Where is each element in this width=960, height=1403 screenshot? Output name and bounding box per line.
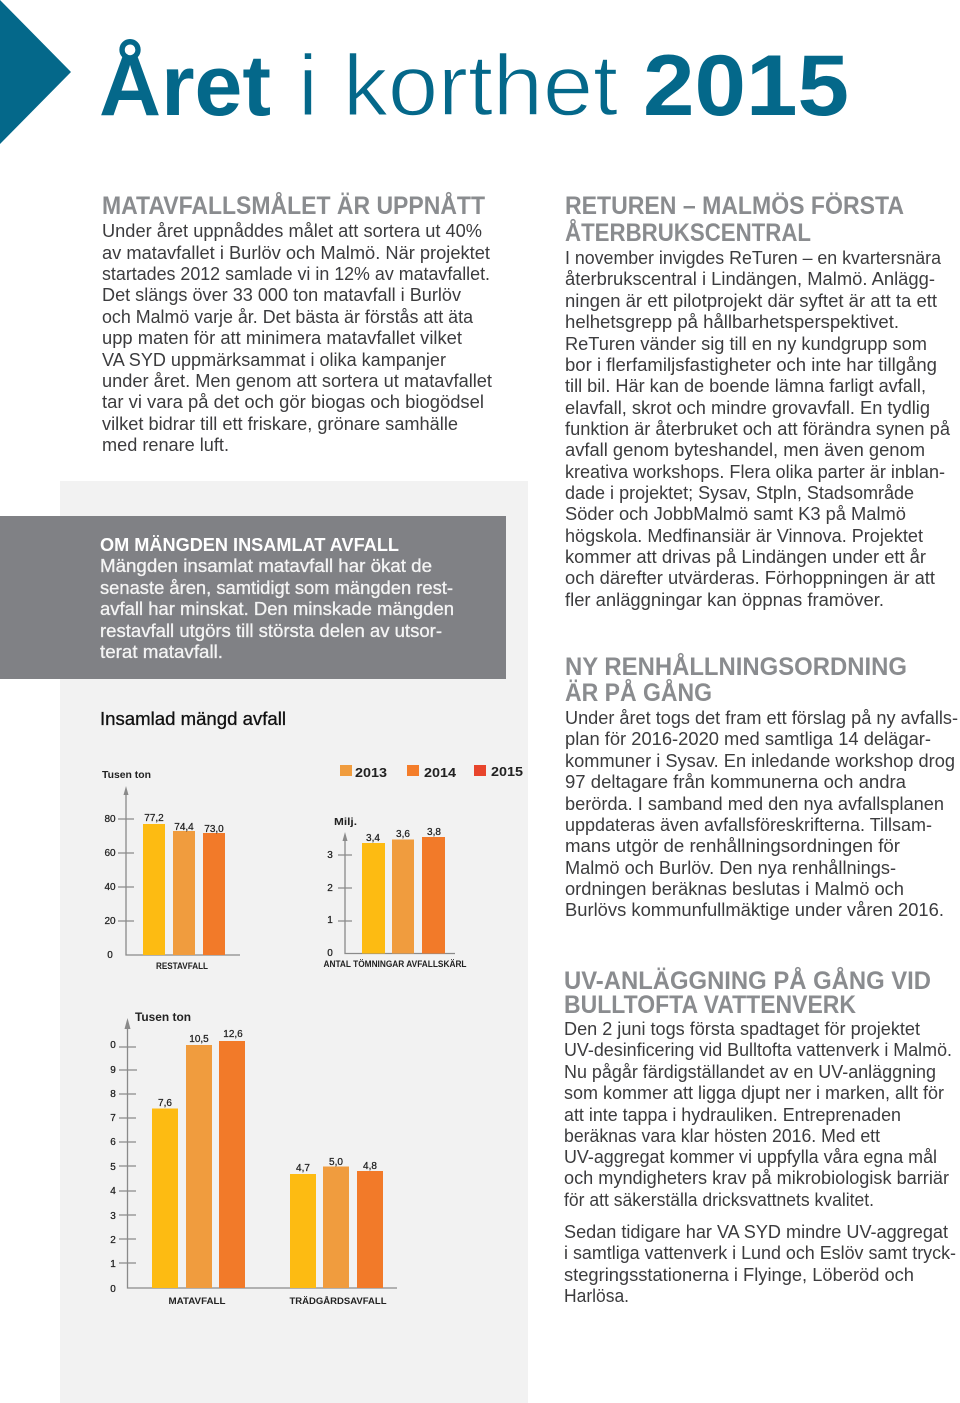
chart: matavfall och trädgårdsavfall: 3 <box>110 1211 116 1222</box>
chart: matavfall och trädgårdsavfall: 4,7 <box>296 1163 310 1174</box>
text block: uv-anläggning: Nu pågår färdigställandet av en UV-anläggning <box>564 1062 936 1082</box>
chart: restavfall <box>102 769 240 971</box>
text block: matavfallsmålet: tar vi vara på det och gör biogas och biogödsel <box>102 392 484 412</box>
text block: uv-anläggning: UV-aggregat kommer vi uppfylla våra egna mål <box>564 1147 937 1167</box>
heading: ny renhållningsordning: ÄR PÅ GÅNG <box>565 678 712 707</box>
chart: antal tömningar avfallskärl: 3 <box>327 850 333 861</box>
text block: matavfallsmålet: av matavfallet i Burlöv och Malmö. När projektet <box>102 243 490 263</box>
text block: sedan tidigare: i samtliga vattenverk i Lund och Eslöv samt tryck- <box>564 1243 956 1263</box>
chart: matavfall och trädgårdsavfall: 0 <box>110 1284 116 1295</box>
chart: restavfall: Tusen ton <box>102 769 151 781</box>
panel: om mängden insamlat avfall: terat matavfall. <box>100 642 223 662</box>
text block: returen: ReTuren vänder sig till en ny kundgrupp som <box>565 334 927 354</box>
chart: matavfall och trädgårdsavfall: 2 <box>110 1235 116 1246</box>
chart: antal tömningar avfallskärl: 2 <box>327 883 333 894</box>
title <box>99 38 849 134</box>
chart: antal tömningar avfallskärl <box>324 816 467 969</box>
text block: matavfallsmålet: upp maten för att minimera matavfallet vilket <box>102 328 462 348</box>
text block: matavfallsmålet: och Malmö varje år. Det bästa är förstås att äta <box>102 307 474 327</box>
chart: antal tömningar avfallskärl: 1 <box>327 915 333 926</box>
chart: matavfall och trädgårdsavfall <box>110 1010 397 1306</box>
text block: matavfallsmålet: under året. Men genom att sortera ut matavfallet <box>102 371 492 391</box>
text block: returen: högskola. Medfinansiär är Vinnova. Projektet <box>565 526 923 546</box>
text block: matavfallsmålet: VA SYD uppmärksammat i olika kampanjer <box>102 350 446 370</box>
chart: matavfall och trädgårdsavfall: 1 <box>110 1259 116 1270</box>
chart: restavfall: 60 <box>104 848 116 859</box>
text block: ny renhållningsordning: ordningen beräknas beslutas i Malmö och <box>565 879 904 899</box>
heading: ny renhållningsordning: NY RENHÅLLNINGSORDNING <box>565 652 907 681</box>
text block: uv-anläggning: beräknas vara klar hösten 2016. Med ett <box>564 1126 880 1146</box>
legend: 2015 <box>491 764 523 779</box>
text block: matavfallsmålet: med renare luft. <box>102 435 229 455</box>
text block: returen: kreativa workshops. Flera olika parter är inblan- <box>565 462 945 482</box>
text block: uv-anläggning: att inte tappa i hydrauliken. Entreprenaden <box>564 1105 901 1125</box>
chart: antal tömningar avfallskärl: 0 <box>327 948 333 959</box>
text block: sedan tidigare: Sedan tidigare har VA SYD mindre UV-aggregat <box>564 1222 948 1242</box>
panel: grey chart background <box>60 481 528 1403</box>
text block: uv-anläggning: för att säkerställa dricksvattnets kvalitet. <box>564 1190 874 1210</box>
text block: matavfallsmålet: startades 2012 samlade vi in 12% av matavfallet. <box>102 264 490 284</box>
text block: returen: kommer att drivas på Lindängen under ett år <box>565 547 926 567</box>
chart: restavfall: 20 <box>104 916 116 927</box>
text block: ny renhållningsordning: mans utgör de renhållningsordningen för <box>565 836 900 856</box>
legend: 2013 <box>355 765 387 780</box>
icon: teal triangle <box>0 0 71 144</box>
text block: returen: helhetsgrepp på hållbarhetsperspektivet. <box>565 312 899 332</box>
chart: antal tömningar avfallskärl: ANTAL TÖMNINGAR AVFALLSKÄRL <box>324 959 467 969</box>
text block: returen: fler anläggningar kan öppnas framöver. <box>565 590 884 610</box>
text block: ny renhållningsordning: kommuner i Sysav. En inledande workshop drog <box>565 751 955 771</box>
chart: matavfall och trädgårdsavfall: 9 <box>110 1065 116 1076</box>
heading: ny renhållningsordning <box>565 652 907 707</box>
chart: restavfall: 80 <box>104 814 116 825</box>
text block: returen: elavfall, skrot och mindre grovavfall. En tydlig <box>565 398 930 418</box>
text block: matavfallsmålet <box>102 221 492 455</box>
text block: ny renhållningsordning: Malmö och Burlöv. Den nya renhållnings- <box>565 858 896 878</box>
heading: matavfallsmålet: MATAVFALLSMÅLET ÄR UPPNÅTT <box>102 191 485 220</box>
chart heading: Insamlad mängd avfall <box>100 709 286 729</box>
text block: returen: avfall genom byteshandel, men även genom <box>565 440 925 460</box>
chart: restavfall: 40 <box>104 882 116 893</box>
chart: matavfall och trädgårdsavfall: 5 <box>110 1162 116 1173</box>
text block: matavfallsmålet: vilket bidrar till ett friskare, grönare samhälle <box>102 414 458 434</box>
heading: returen: RETUREN – MALMÖS FÖRSTA <box>565 191 904 220</box>
text block: uv-anläggning: UV-desinficering vid Bulltofta vattenverk i Malmö. <box>564 1040 952 1060</box>
text block: ny renhållningsordning: Burlövs kommunfullmäktige under våren 2016. <box>565 900 944 920</box>
text block: ny renhållningsordning: uppdateras även avfallsföreskrifterna. Tillsam- <box>565 815 932 835</box>
legend <box>340 764 523 780</box>
heading: uv-anläggning: UV-ANLÄGGNING PÅ GÅNG VID <box>564 966 931 995</box>
text block: sedan tidigare: stegringsstationerna i Flyinge, Löberöd och <box>564 1265 914 1285</box>
panel: om mängden insamlat avfall <box>0 516 506 679</box>
chart: matavfall och trädgårdsavfall: 0 <box>110 1040 116 1051</box>
chart: matavfall och trädgårdsavfall: 12,6 <box>223 1029 243 1040</box>
text block: sedan tidigare: Harlösa. <box>564 1286 629 1306</box>
text block: returen: till bil. Här kan de boende lämna farligt avfall, <box>565 376 926 396</box>
chart: restavfall: 74,4 <box>174 822 194 833</box>
chart: matavfall och trädgårdsavfall: 6 <box>110 1137 116 1148</box>
chart: matavfall och trädgårdsavfall: 8 <box>110 1089 116 1100</box>
text block: ny renhållningsordning: plan för 2016-2020 med samtliga 14 delägar- <box>565 729 931 749</box>
text block: uv-anläggning: som kommer att ligga djupt ner i marken, allt för <box>564 1083 944 1103</box>
panel: om mängden insamlat avfall: Mängden insamlat matavfall har ökat de <box>100 556 432 576</box>
chart: matavfall och trädgårdsavfall: 10,5 <box>189 1034 209 1045</box>
text block: returen: och därefter utvärderas. Förhoppningen är att <box>565 568 935 588</box>
chart: matavfall och trädgårdsavfall: 7 <box>110 1113 116 1124</box>
chart: matavfall och trädgårdsavfall: Tusen ton <box>135 1010 191 1024</box>
text block: returen: bor i flerfamiljsfastigheter och inte har tillgång <box>565 355 937 375</box>
panel: om mängden insamlat avfall: avfall har minskat. Den minskade mängden <box>100 599 454 619</box>
chart: restavfall: 73,0 <box>204 824 224 835</box>
panel: om mängden insamlat avfall: senaste åren, samtidigt som mängden rest- <box>100 578 453 598</box>
title: 2015 <box>643 38 849 134</box>
heading: uv-anläggning <box>564 966 931 1019</box>
chart: matavfall och trädgårdsavfall: TRÄDGÅRDSAVFALL <box>290 1296 387 1306</box>
text block: returen: I november invigdes ReTuren – en kvartersnära <box>565 248 942 268</box>
text block: returen: dade i projektet; Sysav, Stpln, Stadsområde <box>565 483 914 503</box>
text block: returen: återbrukscentral i Lindängen, Malmö. Anlägg- <box>565 269 935 289</box>
text block: sedan tidigare <box>564 1222 956 1306</box>
panel: om mängden insamlat avfall: OM MÄNGDEN INSAMLAT AVFALL <box>100 535 399 555</box>
text block: returen: Söder och JobbMalmö samt K3 på Malmö <box>565 504 906 524</box>
heading: returen <box>565 191 904 247</box>
chart: matavfall och trädgårdsavfall: 7,6 <box>158 1098 172 1109</box>
heading: uv-anläggning: BULLTOFTA VATTENVERK <box>564 991 856 1019</box>
text block: returen <box>565 248 951 610</box>
chart: restavfall: 77,2 <box>144 813 164 824</box>
text block: ny renhållningsordning: berörda. I samband med den nya avfallsplanen <box>565 794 944 814</box>
chart: antal tömningar avfallskärl: 3,8 <box>427 827 441 838</box>
panel: om mängden insamlat avfall: restavfall utgörs till största delen av utsor- <box>100 621 442 641</box>
chart: restavfall: 0 <box>107 950 113 961</box>
text block: ny renhållningsordning: Under året togs det fram ett förslag på ny avfalls- <box>565 708 958 728</box>
text block: uv-anläggning: och myndigheters krav på mikrobiologisk barriär <box>564 1168 949 1188</box>
chart: antal tömningar avfallskärl: Milj. <box>334 816 357 828</box>
chart: matavfall och trädgårdsavfall: MATAVFALL <box>168 1296 226 1306</box>
text block: uv-anläggning: Den 2 juni togs första spadtaget för projektet <box>564 1019 920 1039</box>
legend: 2014 <box>424 765 457 780</box>
chart: matavfall och trädgårdsavfall: 4,8 <box>363 1161 377 1172</box>
text block: matavfallsmålet: Under året uppnåddes målet att sortera ut 40% <box>102 221 482 241</box>
chart: matavfall och trädgårdsavfall: 4 <box>110 1186 116 1197</box>
title: i korthet <box>298 38 618 134</box>
text block: ny renhållningsordning <box>565 708 958 920</box>
text block: returen: ningen är ett pilotprojekt där syftet är att ta ett <box>565 291 937 311</box>
chart: restavfall: RESTAVFALL <box>156 961 208 971</box>
chart: antal tömningar avfallskärl: 3,6 <box>396 829 410 840</box>
text block: returen: funktion är återbruket och att förändra synen på <box>565 419 951 439</box>
text block: ny renhållningsordning: 97 deltagare från kommunerna och andra <box>565 772 907 792</box>
text block: uv-anläggning <box>564 1019 952 1210</box>
chart: matavfall och trädgårdsavfall: 5,0 <box>329 1157 343 1168</box>
text block: matavfallsmålet: Det slängs över 33 000 ton matavfall i Burlöv <box>102 285 461 305</box>
title: Året <box>99 38 271 134</box>
chart: antal tömningar avfallskärl: 3,4 <box>366 833 380 844</box>
heading: returen: ÅTERBRUKSCENTRAL <box>565 218 811 247</box>
